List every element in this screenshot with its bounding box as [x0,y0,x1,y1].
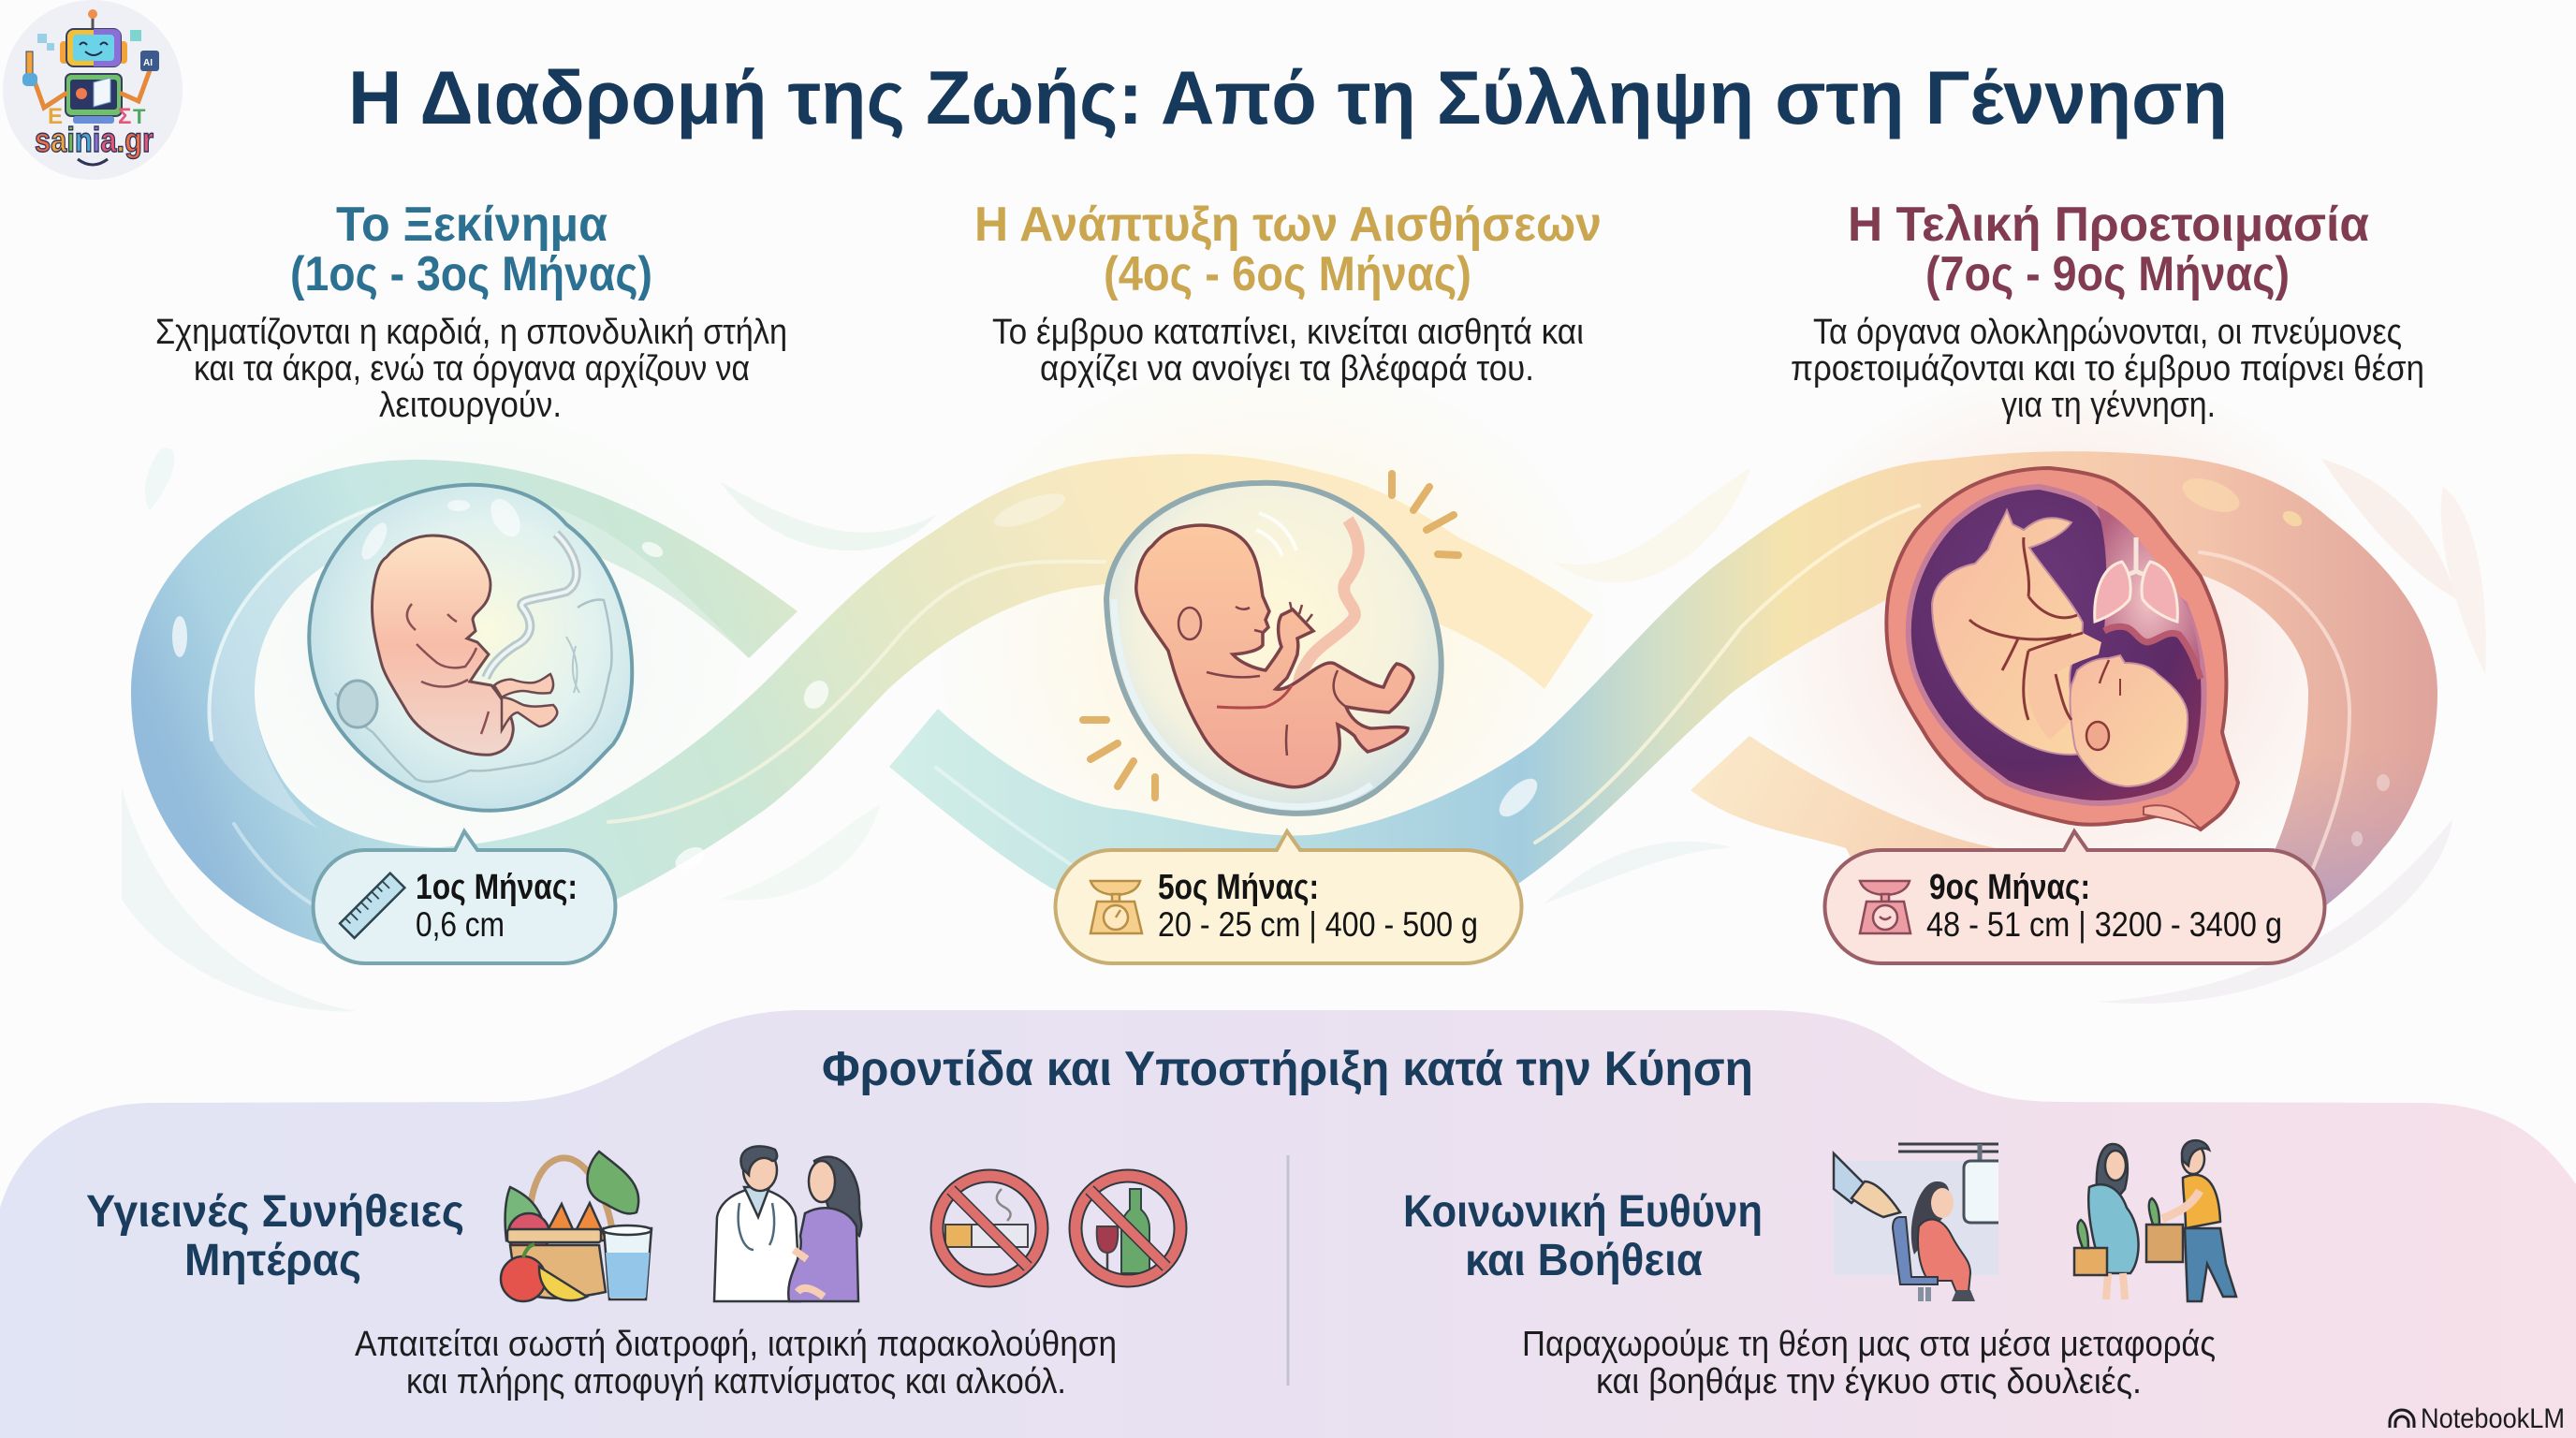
lung window and membrane [2097,506,2201,674]
callout: month 1: 0,6 cm [416,905,505,944]
icon: giving up a seat on transit [1834,1144,1998,1301]
heading: social responsibility: και Βοήθεια [1465,1236,1703,1285]
highlights [210,492,2349,936]
text: mother's habits description: και πλήρης αποφυγή καπνίσματος και αλκοόλ. [406,1362,1066,1401]
strand A [131,454,1593,956]
text: first stage description [155,313,787,425]
heading: mother's habits: Μητέρας [184,1236,361,1285]
text: mother's habits description: Απαιτείται σωστή διατροφή, ιατρική παρακολούθηση [355,1325,1117,1364]
callout: month 9: 48 - 51 cm | 3200 - 3400 g [1926,905,2282,944]
icon: scale [1860,881,1910,933]
title: Η Διαδρομή της Ζωής: Από τη Σύλληψη στη Γέννηση [348,56,2228,140]
text: second stage description: αρχίζει να ανοίγει τα βλέφαρά του. [1040,349,1534,389]
text: third stage description: προετοιμάζονται και το έμβρυο παίρνει θέση [1791,349,2424,389]
heading: third stage [1848,198,2369,301]
logo: sainia.gr: AI [143,58,153,68]
callout: month 1 [314,831,615,963]
illustration: full-term fetus in uterus [1886,468,2238,829]
arm [2027,633,2101,740]
inner pale band on left loop [210,492,749,829]
lungs [2095,537,2177,622]
callout: month 5 [1055,831,1521,963]
text: third stage description [1791,313,2424,425]
heading: second stage: Η Ανάπτυξη των Αισθήσεων [974,198,1602,252]
text: second stage description: Το έμβρυο καταπίνει, κινείται αισθητά και [992,313,1584,352]
text: third stage description: Τα όργανα ολοκληρώνονται, οι πνεύμονες [1813,313,2402,352]
text: mother's habits description [355,1325,1117,1401]
callout: month 5: 5ος Μήνας: [1158,868,1319,907]
illustration: embryo in amniotic sac [309,485,632,811]
illustration: fetus with sense rays [1083,474,1458,814]
text: first stage description: και τα άκρα, ενώ τα όργανα αρχίζουν να [194,349,750,389]
heading: third stage: Η Τελική Προετοιμασία [1848,198,2369,252]
wisps [122,448,2486,1011]
text: first stage description: Σχηματίζονται η καρδιά, η σπονδυλική στήλη [155,313,787,352]
text: social responsibility description: και βοηθάμε την έγκυο στις δουλειές. [1596,1362,2142,1401]
logo: sainia.gr [3,0,183,180]
strand C [1690,736,2003,899]
icon: scale [1090,881,1142,933]
text: social responsibility description: Παραχωρούμε τη θέση μας στα μέσα μεταφοράς [1522,1325,2216,1364]
embryo body [372,536,513,755]
heading: first stage: (1ος - 3ος Μήνας) [290,247,652,301]
text: first stage description: λειτουργούν. [379,386,562,425]
fetus body [1932,510,2083,755]
heading: first stage: Το Ξεκίνημα [336,198,607,252]
callout: month 9: 9ος Μήνας: [1929,868,2090,907]
callout: month 5: 20 - 25 cm | 400 - 500 g [1158,905,1478,944]
icon: no smoking [937,1176,1042,1281]
heading: social responsibility: Κοινωνική Ευθύνη [1403,1187,1763,1237]
flowing ribbon background [122,358,2486,1011]
text: social responsibility description [1522,1325,2216,1401]
text: second stage description [992,313,1584,389]
heading: mother's habits [86,1187,464,1285]
heading: care and support: Φροντίδα και Υποστήριξη κατά την Κύηση [822,1042,1753,1096]
heading: first stage [290,198,652,301]
logo: sainia.gr: Σ [118,104,131,129]
callout: month 1: 1ος Μήνας: [416,868,578,907]
callout: month 9 [1825,831,2324,963]
text: third stage description: για τη γέννηση. [2001,386,2216,425]
heading: second stage [974,198,1602,301]
head [2071,655,2188,786]
icon: doctor and pregnant woman [714,1146,861,1301]
heading: second stage: (4ος - 6ος Μήνας) [1104,247,1471,301]
heading: mother's habits: Υγιεινές Συνήθειες [86,1187,464,1237]
purple cavity [1909,487,2204,803]
logo: sainia.gr: Τ [133,105,146,128]
strand B [889,451,2437,946]
heading: social responsibility [1403,1187,1763,1285]
logo: sainia.gr: Ε [48,104,63,129]
fetus body [1136,525,1413,787]
icon: ruler [340,873,404,938]
umbilical cord [1297,520,1358,689]
icon: helping with shopping bags [2074,1140,2236,1301]
limbs [494,674,553,697]
NotebookLM badge: NotebookLM [2421,1403,2565,1434]
panel: care and support [0,1010,2576,1438]
logo: sainia.gr: sainia.gr [35,121,154,159]
icon: no alcohol [1076,1176,1180,1281]
heading: third stage: (7ος - 9ος Μήνας) [1925,247,2290,301]
icon: healthy food basket [501,1152,651,1301]
